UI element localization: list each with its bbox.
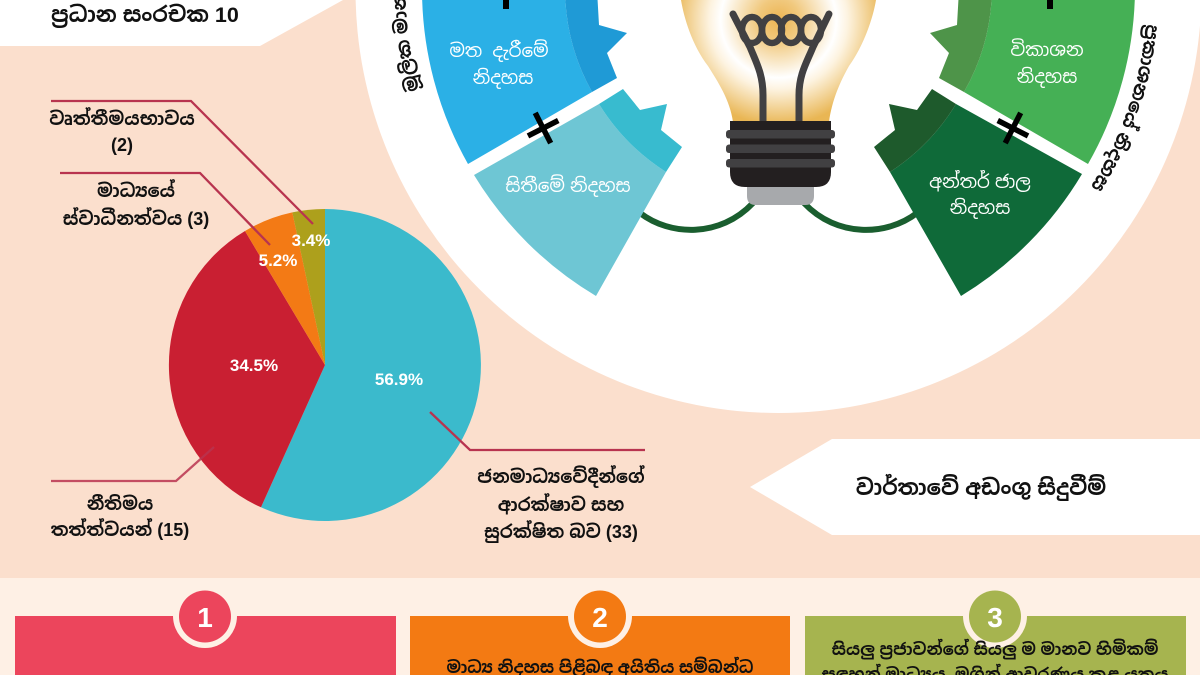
icon: cross right [996, 112, 1029, 144]
sector: freedom of thought: සිතීමේ නිදහස [505, 173, 631, 197]
card 3: 3 [987, 602, 1003, 633]
label: media independence [60, 173, 270, 245]
bulb cap [747, 186, 814, 205]
sector: freedom of broadcasting: විකාශන [1010, 37, 1084, 60]
sector: internet freedom [874, 89, 1082, 296]
label: professionalism: (2) [111, 135, 133, 155]
icon: light bulb [681, 0, 876, 205]
card 1: 1 [197, 602, 213, 633]
icon: cross left [527, 112, 560, 144]
sector: internet freedom: නිදහස [950, 197, 1010, 219]
bulb screw base [726, 121, 835, 187]
sector: freedom of opinion: මත දැරීමේ [449, 38, 549, 62]
label: media independence: ස්වාධීනත්වය (3) [63, 206, 209, 229]
label: legal conditions [51, 447, 214, 540]
filament [733, 14, 829, 122]
sector: freedom of opinion [422, 0, 627, 164]
pie value labels: 3.4% [292, 231, 330, 250]
pie value labels [230, 231, 423, 389]
pie value labels: 34.5% [230, 356, 278, 375]
sector: internet freedom: අන්තර් ජාල [929, 170, 1031, 193]
label: legal conditions: නීතිමය [87, 494, 153, 514]
card 3: සියලු ප්‍රජාවන්ගේ සියලු ම මානව හිමිකම් [832, 638, 1158, 659]
label: journalist safety: ආරක්ෂාව සහ [498, 492, 625, 515]
panel: freedoms wheel [356, 0, 1200, 413]
icon: cross stub right [1047, 0, 1053, 9]
pie value labels: 56.9% [375, 370, 423, 389]
pie chart [169, 209, 481, 521]
sector: freedom of broadcasting [930, 0, 1135, 164]
label: professionalism [49, 101, 313, 224]
banner: main components [0, 0, 343, 46]
label: journalist safety: ජනමාධ්‍යවේදීන්ගේ [477, 464, 645, 488]
banner: incidents in the report: වාර්තාවේ අඩංගු සිදුවීම් [856, 474, 1106, 501]
bulb glass [681, 0, 876, 122]
banner: incidents in the report [750, 439, 1200, 535]
pie value labels: 5.2% [259, 251, 297, 270]
label: legal conditions: තත්ත්වයන් (15) [51, 517, 189, 540]
sector: freedom of thought [474, 89, 682, 296]
label: journalist safety [430, 412, 645, 543]
card 3 [805, 584, 1186, 675]
label: journalist safety: සුරක්ෂිත බව (33) [484, 519, 638, 543]
icon: cross stub left [503, 0, 509, 9]
sector: freedom of opinion: නිදහස [473, 67, 533, 89]
card 1 [15, 584, 396, 675]
sector: freedom of broadcasting: නිදහස [1017, 66, 1077, 88]
label: media independence: මාධ්‍යයේ [97, 178, 176, 201]
label: professionalism: වෘත්තීමයභාවය [49, 106, 195, 129]
panel: recommendations band [0, 578, 1200, 675]
card 2: 2 [592, 602, 608, 633]
banner: main components: ප්‍රධාන සංරචක 10 [51, 3, 239, 28]
connector wires [640, 203, 917, 230]
arc heading right: ප්‍රකාශනයේ නිදහස [1092, 24, 1157, 191]
card 2 [410, 584, 790, 675]
